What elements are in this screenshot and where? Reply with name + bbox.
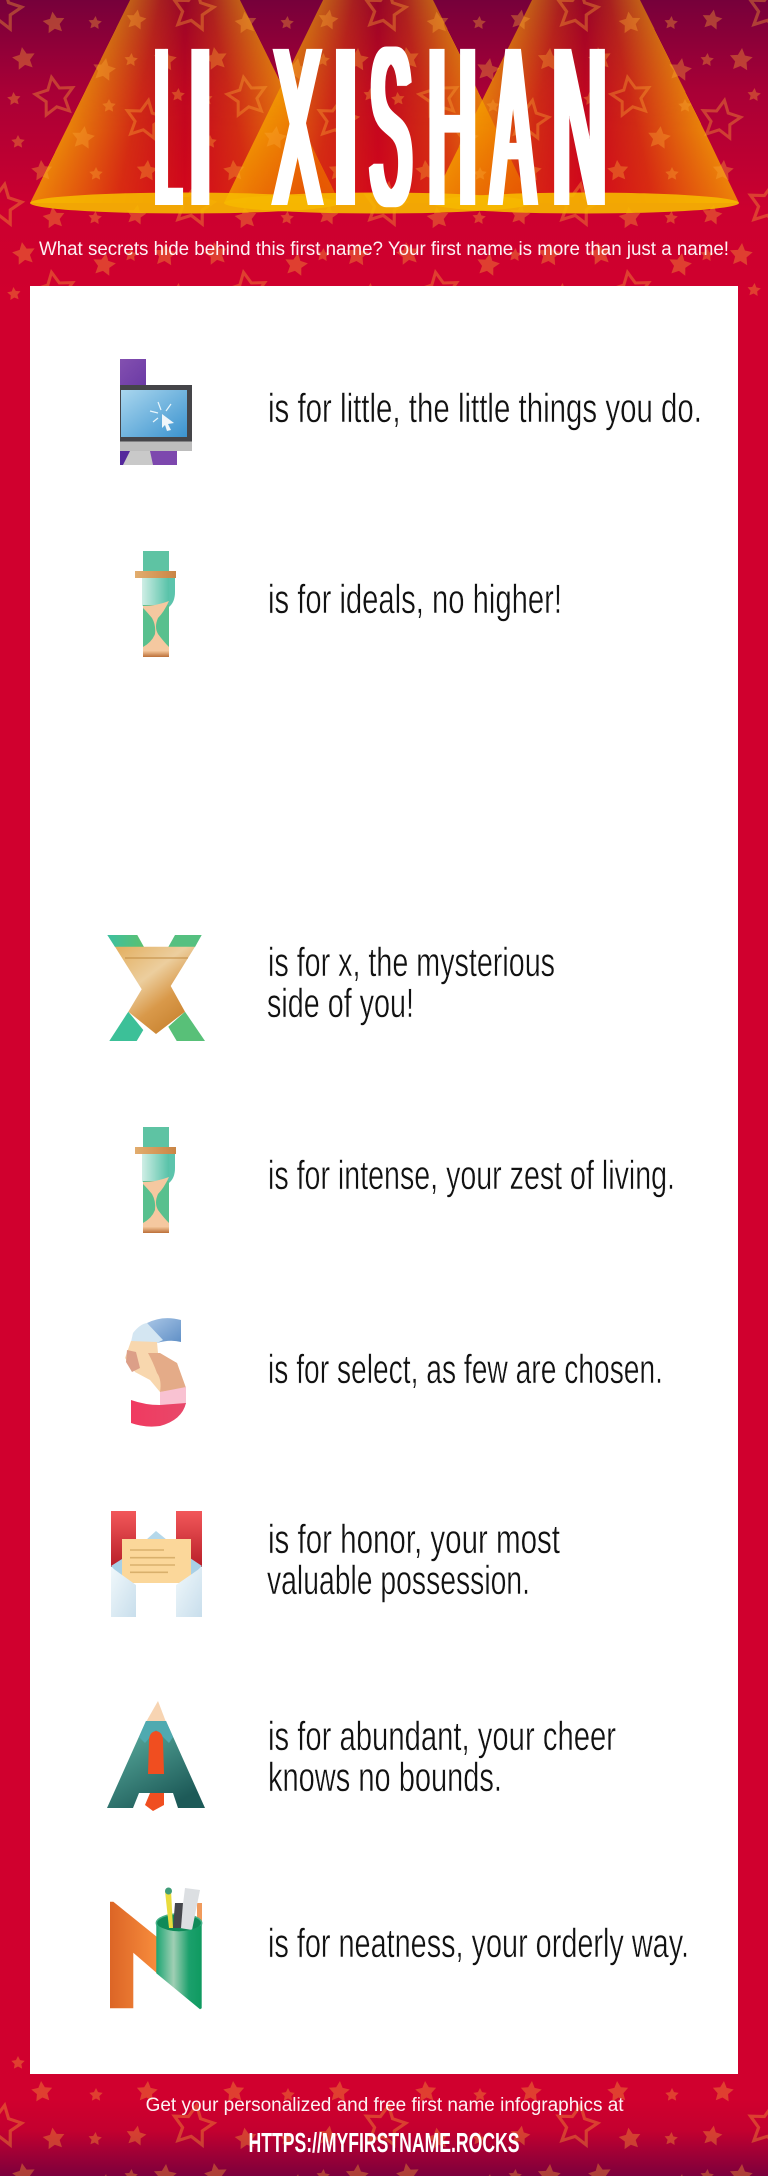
row: letter N bbox=[110, 1888, 689, 2009]
title: S bbox=[370, 1, 411, 254]
spotlights bbox=[30, 0, 739, 203]
title: I bbox=[330, 1, 360, 254]
row: letter X bbox=[107, 935, 555, 1041]
subtitle: What secrets hide behind this first name? Your first name is more than just a name! bbox=[39, 239, 729, 260]
text: X lines: is for x, the mysterious bbox=[268, 939, 555, 985]
text: X lines: side of you! bbox=[267, 980, 414, 1026]
panel: white content area bbox=[30, 286, 738, 2074]
title: X bbox=[274, 1, 321, 254]
icon: H envelope bbox=[111, 1511, 202, 1617]
text: I line: is for ideals, no higher! bbox=[268, 576, 562, 622]
row: letter I bbox=[135, 551, 562, 657]
footer text: Get your personalized and free first name infographics at bbox=[146, 2095, 624, 2116]
icon: L monitor bbox=[120, 359, 192, 465]
text: H lines: is for honor, your most bbox=[268, 1516, 560, 1562]
row: letter H bbox=[111, 1511, 560, 1617]
page content: N bbox=[552, 1, 606, 254]
text: H lines bbox=[267, 1516, 560, 1603]
row: letter A bbox=[107, 1701, 616, 1811]
title: L bbox=[156, 1, 180, 254]
text: A lines: knows no bounds. bbox=[268, 1754, 502, 1800]
row: letter S bbox=[125, 1318, 663, 1427]
title: I bbox=[187, 1, 214, 254]
icon: N pen cup bbox=[110, 1888, 202, 2009]
footer url: HTTPS://MYFIRSTNAME.ROCKS bbox=[248, 2127, 520, 2158]
text: A lines: is for abundant, your cheer bbox=[268, 1713, 616, 1759]
text: A lines bbox=[268, 1713, 616, 1800]
title: H bbox=[428, 1, 476, 254]
icon: S handshake bbox=[125, 1318, 186, 1427]
icon: X shield bbox=[107, 935, 205, 1041]
spotlight pools bbox=[30, 192, 739, 214]
icon: A suit and tie bbox=[107, 1701, 205, 1811]
text: H lines: valuable possession. bbox=[267, 1557, 530, 1603]
row: letter L bbox=[120, 359, 702, 465]
icon: I hourglass bbox=[135, 551, 176, 657]
text: X lines bbox=[267, 939, 555, 1026]
icon: I hourglass bbox=[135, 1127, 176, 1233]
row: letter I second bbox=[135, 1127, 675, 1233]
title: A bbox=[492, 1, 534, 254]
